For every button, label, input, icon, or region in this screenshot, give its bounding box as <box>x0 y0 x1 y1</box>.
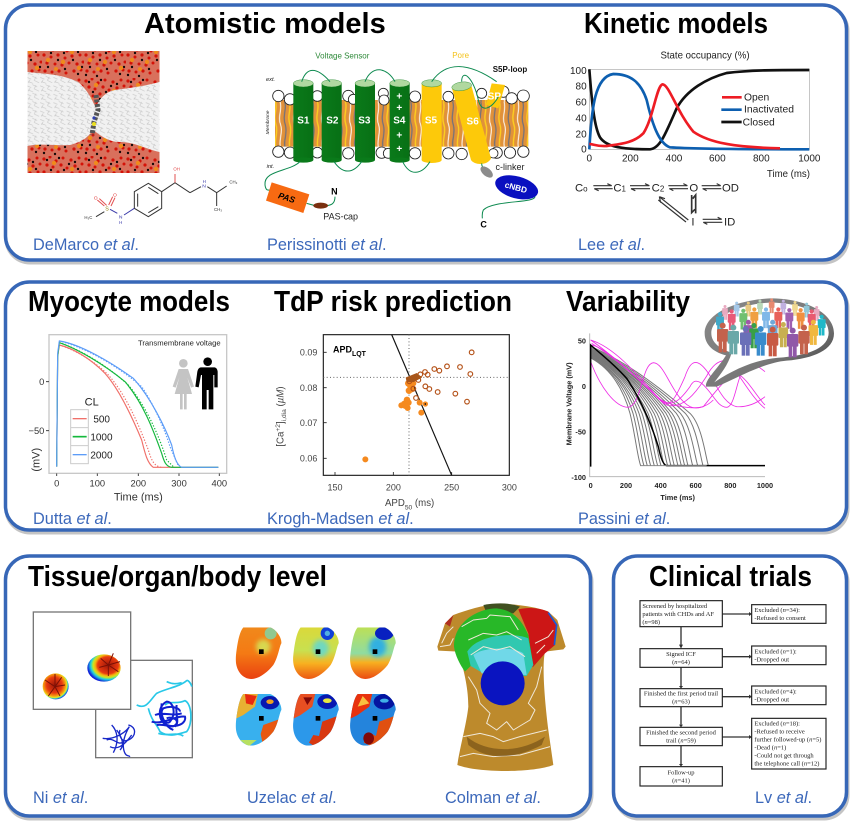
state occupancy chart: 800 <box>753 154 770 165</box>
membrane voltage population chart: Membrane Voltage (mV) <box>565 362 574 445</box>
helices S5 and S6: SP <box>488 91 501 102</box>
PAS domain <box>266 182 358 222</box>
scatter chart: APD50 vs calcium: ] <box>275 421 286 424</box>
connecting loops <box>265 67 535 218</box>
state occupancy chart: 0 <box>587 154 593 165</box>
helices S1 to S4: + <box>396 103 402 114</box>
state occupancy chart: Time (ms) <box>767 169 810 180</box>
crowd: back rows <box>716 298 826 348</box>
membrane voltage population chart: 200 <box>620 481 632 490</box>
helices S1 to S4: + <box>396 91 402 102</box>
scatter chart: APD50 vs calcium: 0.06 <box>300 454 317 464</box>
molecule structure: H <box>203 179 206 184</box>
scatter chart: APD50 vs calcium: +2 <box>275 424 282 432</box>
molecule structure: N <box>119 214 123 220</box>
scatter chart: APD50 vs calcium: µM) <box>275 386 286 403</box>
scatter chart: APD50 vs calcium: APD <box>385 498 405 509</box>
scatter chart: APD50 vs calcium: ( <box>275 402 286 409</box>
molecule structure: CH₃ <box>214 207 222 212</box>
CNBD domain: C <box>480 219 487 229</box>
scatter chart: APD50 vs calcium: (ms) <box>412 498 434 509</box>
legend: cycle length <box>71 396 113 464</box>
back square: filament traces <box>96 660 192 758</box>
helices S1 to S4: S4 <box>393 116 406 127</box>
flowchart text: (n=64) <box>672 659 690 666</box>
ion channel diagram <box>265 51 541 229</box>
patient flowchart <box>640 601 826 786</box>
heading: atomistic models: Atomistic models <box>144 8 386 40</box>
scatter chart: APD50 vs calcium <box>275 335 517 511</box>
membrane voltage population chart: Time (ms) <box>660 493 695 502</box>
flowchart text: -Dropped out <box>754 696 789 703</box>
membrane voltage population chart: -100 <box>571 473 586 482</box>
scatter chart: APD50 vs calcium: 0.08 <box>300 383 317 393</box>
molecule structure: N <box>202 184 206 190</box>
flowchart text: (n=41) <box>672 777 690 784</box>
scatter chart: APD50 vs calcium: i,dia <box>281 409 288 421</box>
solid points <box>362 377 428 462</box>
curve: closed <box>589 69 809 149</box>
transmembrane voltage chart: 0 <box>39 377 44 387</box>
heading: variability: Variability <box>566 286 690 318</box>
CNBD domain: c-linker <box>496 162 524 172</box>
flowchart text: -Refused to receive <box>754 729 805 736</box>
membrane voltage population chart: -50 <box>575 427 586 436</box>
state occupancy chart <box>570 51 821 180</box>
Markov state scheme: C1 <box>613 183 627 195</box>
state occupancy chart: 40 <box>576 113 587 124</box>
diagram labels: int. <box>267 164 274 170</box>
credit: DeMarco: DeMarco et al. <box>33 236 139 254</box>
voltage curves <box>57 341 218 467</box>
panel: tissue, organ and body level <box>6 556 592 819</box>
helices S1 to S4: + <box>396 144 402 155</box>
curve: inactivated <box>589 74 809 149</box>
flowchart text: the telephone call (n=12) <box>754 761 819 768</box>
Markov state scheme <box>575 183 739 228</box>
transmembrane voltage chart: 0 <box>54 479 59 489</box>
flowchart text: Excluded (n=1): <box>754 649 797 656</box>
chart legend: Inactivated <box>744 104 794 115</box>
panel: clinical trials <box>614 556 848 819</box>
molecule structure: H₃C <box>84 215 92 220</box>
diagram labels: Pore <box>452 51 470 60</box>
curve: open <box>589 84 780 148</box>
flowchart text: Signed ICF <box>666 651 696 658</box>
transmembrane voltage chart: −50 <box>29 426 44 436</box>
credit: Colman: Colman et al. <box>445 789 541 807</box>
spiral wave simulations <box>33 612 192 758</box>
legend: cycle length: CL <box>85 396 99 408</box>
chart legend <box>721 93 794 128</box>
icon: woman <box>173 359 194 409</box>
state occupancy chart: 20 <box>576 129 587 140</box>
transmembrane voltage chart: 100 <box>90 479 105 489</box>
flowchart text <box>642 603 821 784</box>
crowd: front row <box>717 323 810 357</box>
transmembrane voltage chart: Transmembrane voltage <box>138 338 221 347</box>
legend: cycle length: 2000 <box>90 451 113 462</box>
panel frame <box>6 282 846 530</box>
credit: Ni: Ni et al. <box>33 789 88 807</box>
molecule structure <box>84 167 238 225</box>
panel frame <box>614 556 846 816</box>
icon: man <box>195 357 218 409</box>
flowchart text: -Dead (n=1) <box>754 745 786 752</box>
helices S5 and S6 <box>422 80 505 164</box>
credit: Passini: Passini et al. <box>578 510 670 528</box>
Markov state scheme: Co <box>575 183 588 195</box>
panel: atomistic and kinetic models <box>6 5 848 263</box>
state occupancy chart: 100 <box>570 66 587 77</box>
flowchart text: Finished the first period trail <box>644 690 718 697</box>
PAS domain: PAS <box>277 190 297 205</box>
open points <box>407 350 474 404</box>
flowchart text: patients with CHDs and AF <box>642 611 714 618</box>
scatter chart: APD50 vs calcium: 300 <box>502 483 517 493</box>
heading: myocyte models: Myocyte models <box>28 286 230 318</box>
membrane voltage population chart: 0 <box>589 481 593 490</box>
chart legend: Closed <box>743 117 775 128</box>
flowchart text: Finished the second period <box>646 730 717 737</box>
heading: clinical trials: Clinical trials <box>649 561 812 593</box>
flowchart text: (n=63) <box>672 698 690 705</box>
state occupancy chart: 0 <box>581 145 587 156</box>
scatter chart: APD50 vs calcium: 0.07 <box>300 418 317 428</box>
membrane voltage population chart: 0 <box>582 382 586 391</box>
flowchart text: Screened by hospitalized <box>642 603 708 610</box>
grey population traces <box>591 347 708 466</box>
Markov state scheme: I <box>691 216 694 228</box>
flowchart text: trail (n=59) <box>666 738 696 745</box>
flowchart text: -Could not get through <box>754 753 814 760</box>
flow arrows <box>679 612 752 767</box>
panel frame <box>6 556 590 816</box>
flowchart text: -Refused to consent <box>754 615 806 622</box>
panel: cell level models <box>6 282 848 533</box>
state occupancy chart: 200 <box>622 154 639 165</box>
helices S1 to S4: S2 <box>326 116 339 127</box>
scatter chart: APD50 vs calcium: 200 <box>386 483 401 493</box>
state occupancy chart: 400 <box>666 154 683 165</box>
transmembrane voltage chart: Time (ms) <box>114 491 163 503</box>
front square: spiral waves <box>33 612 131 709</box>
diagram labels: Voltage Sensor <box>315 51 370 60</box>
state occupancy chart: 600 <box>709 154 726 165</box>
state occupancy chart: State occupancy (%) <box>660 51 750 62</box>
membrane voltage population chart: 800 <box>724 481 736 490</box>
legend: cycle length: 500 <box>93 415 110 426</box>
Markov state scheme: C2 <box>652 183 665 195</box>
Markov state scheme: ID <box>724 216 735 228</box>
left flow boxes <box>640 601 722 786</box>
top row hearts <box>236 627 396 679</box>
heading: tissue level: Tissue/organ/body level <box>28 561 327 593</box>
speech bubble with crowd <box>705 298 834 387</box>
helices S5 and S6: S5 <box>425 116 438 127</box>
scatter chart: APD50 vs calcium: 150 <box>327 483 342 493</box>
flowchart text: -Dropped out <box>754 657 789 664</box>
helices S1 to S4: S3 <box>358 116 371 127</box>
Markov state scheme: O <box>689 183 698 195</box>
molecule structure: H <box>119 220 122 225</box>
diagram labels: ext. <box>266 77 275 83</box>
scatter chart: APD50 vs calcium: LQT <box>352 351 367 358</box>
transmembrane voltage chart: (mV) <box>30 448 42 472</box>
credit: Uzelac: Uzelac et al. <box>247 789 337 807</box>
flowchart text: (n=98) <box>642 619 660 626</box>
legend: cycle length: 1000 <box>90 433 113 444</box>
credit: Krogh-Madsen: Krogh-Madsen et al. <box>267 510 414 528</box>
transmembrane voltage chart <box>29 335 227 503</box>
credit: Dutta: Dutta et al. <box>33 510 112 528</box>
credit: Lee: Lee et al. <box>578 236 645 254</box>
diagram labels: S5P-loop <box>493 65 527 74</box>
bottom row hearts <box>236 694 396 746</box>
heading: TdP risk prediction: TdP risk prediction <box>274 286 512 318</box>
scatter chart: APD50 vs calcium: APD <box>333 345 352 355</box>
state occupancy chart: 1000 <box>798 154 821 165</box>
scatter chart: APD50 vs calcium: [Ca <box>275 432 286 447</box>
molecule structure: O <box>113 192 117 198</box>
credit: Perissinotti: Perissinotti et al. <box>267 236 386 254</box>
black reference trace <box>591 345 765 467</box>
PAS domain: N <box>331 186 338 196</box>
state occupancy chart: 80 <box>576 82 587 93</box>
membrane lipids <box>273 86 529 160</box>
flowchart text: Excluded (n=4): <box>754 688 797 695</box>
helices S1 to S4: + <box>396 130 402 141</box>
Markov state scheme: OD <box>722 183 739 195</box>
molecule structure: O <box>94 195 98 201</box>
molecule structure: S <box>105 207 109 213</box>
flowchart text: further followed-up (n=5) <box>754 737 821 744</box>
membrane voltage population chart: 50 <box>578 336 586 345</box>
right exclusion boxes <box>752 605 826 769</box>
molecular dynamics snapshot <box>28 51 160 173</box>
helices S5 and S6: S6 <box>467 116 479 127</box>
molecule structure: OH <box>173 167 180 172</box>
flowchart text: Excluded (n=34): <box>754 607 800 614</box>
scatter chart: APD50 vs calcium: 0.09 <box>300 348 317 358</box>
flowchart text: Excluded (n=18): <box>754 721 800 728</box>
transmembrane voltage chart: 300 <box>171 479 187 489</box>
membrane voltage population chart: 1000 <box>757 481 773 490</box>
CNBD domain <box>478 162 541 229</box>
CNBD domain: cNBD <box>504 180 528 195</box>
diagram labels <box>265 51 527 170</box>
magenta oscillating traces <box>591 340 765 408</box>
helices S1 to S4: S1 <box>297 116 310 127</box>
transmembrane voltage chart: 200 <box>131 479 146 489</box>
heading: kinetic models: Kinetic models <box>584 8 768 40</box>
scatter chart: APD50 vs calcium: 50 <box>405 504 413 511</box>
diagram labels: Membrane <box>265 110 271 134</box>
helices S1 to S4 <box>293 80 410 163</box>
membrane voltage population chart: 600 <box>690 481 702 490</box>
chart legend: Open <box>744 93 770 104</box>
credit: Lv: Lv et al. <box>755 789 812 807</box>
panel frame <box>6 5 846 260</box>
membrane voltage population chart: 400 <box>655 481 667 490</box>
PAS domain: PAS-cap <box>323 212 358 222</box>
flowchart text: Follow-up <box>667 769 695 776</box>
torso potential map <box>437 603 566 771</box>
molecule structure: CH₃ <box>229 179 238 184</box>
membrane voltage population chart <box>565 298 834 502</box>
transmembrane voltage chart: 400 <box>212 479 227 489</box>
state occupancy chart: 60 <box>576 98 587 109</box>
activation maps of hearts <box>233 625 398 748</box>
scatter chart: APD50 vs calcium: 250 <box>444 483 459 493</box>
